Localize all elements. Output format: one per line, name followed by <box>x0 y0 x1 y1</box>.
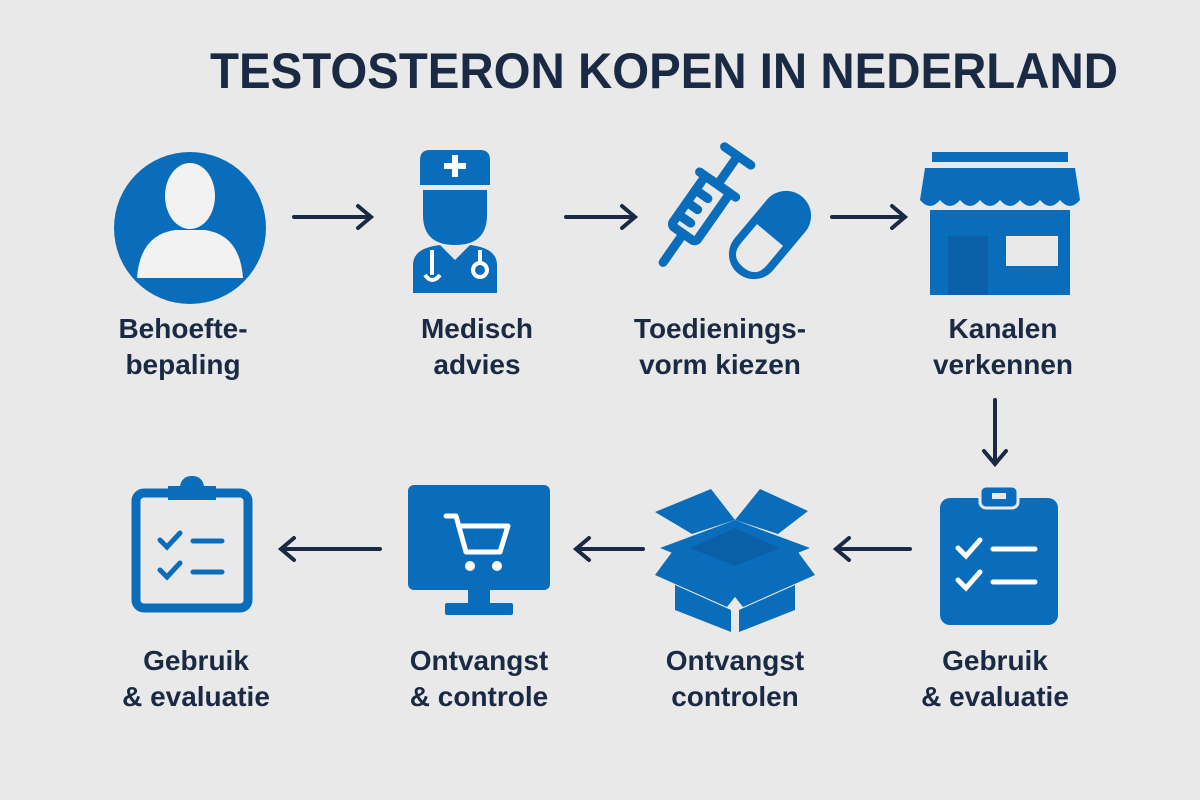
label 2: advies <box>433 349 521 380</box>
arrow 7 <box>281 538 380 560</box>
label 3: Toedienings- <box>634 313 806 344</box>
label 8: & evaluatie <box>921 681 1069 712</box>
label 8: Gebruik <box>942 645 1048 676</box>
label 1: Behoefte- <box>118 313 248 344</box>
label 5: & evaluatie <box>122 681 270 712</box>
label 1: bepaling <box>125 349 241 380</box>
arrow down <box>984 400 1006 464</box>
icon: open box <box>655 489 815 632</box>
label 4: Kanalen <box>949 313 1057 344</box>
label 7: Ontvangst <box>666 645 804 676</box>
label 6: & controle <box>410 681 548 712</box>
icon: clipboard outline <box>136 476 248 608</box>
arrow 6 <box>576 538 643 560</box>
icon: doctor <box>413 150 497 293</box>
arrow 2 <box>566 206 635 228</box>
arrow 5 <box>836 538 910 560</box>
label 3: vorm kiezen <box>639 349 801 380</box>
title: TESTOSTERON KOPEN IN NEDERLAND <box>210 43 1118 99</box>
icon: monitor with cart <box>408 485 550 615</box>
label 7: controlen <box>671 681 799 712</box>
label 4: verkennen <box>933 349 1073 380</box>
icon: person <box>114 152 266 304</box>
icon: syringe and pill <box>645 143 821 289</box>
label 6: Ontvangst <box>410 645 548 676</box>
label 5: Gebruik <box>143 645 249 676</box>
label 2: Medisch <box>421 313 533 344</box>
arrow 3 <box>832 206 905 228</box>
arrow 1 <box>294 206 371 228</box>
icon: clipboard blue filled <box>940 486 1058 625</box>
icon: store <box>920 152 1080 295</box>
